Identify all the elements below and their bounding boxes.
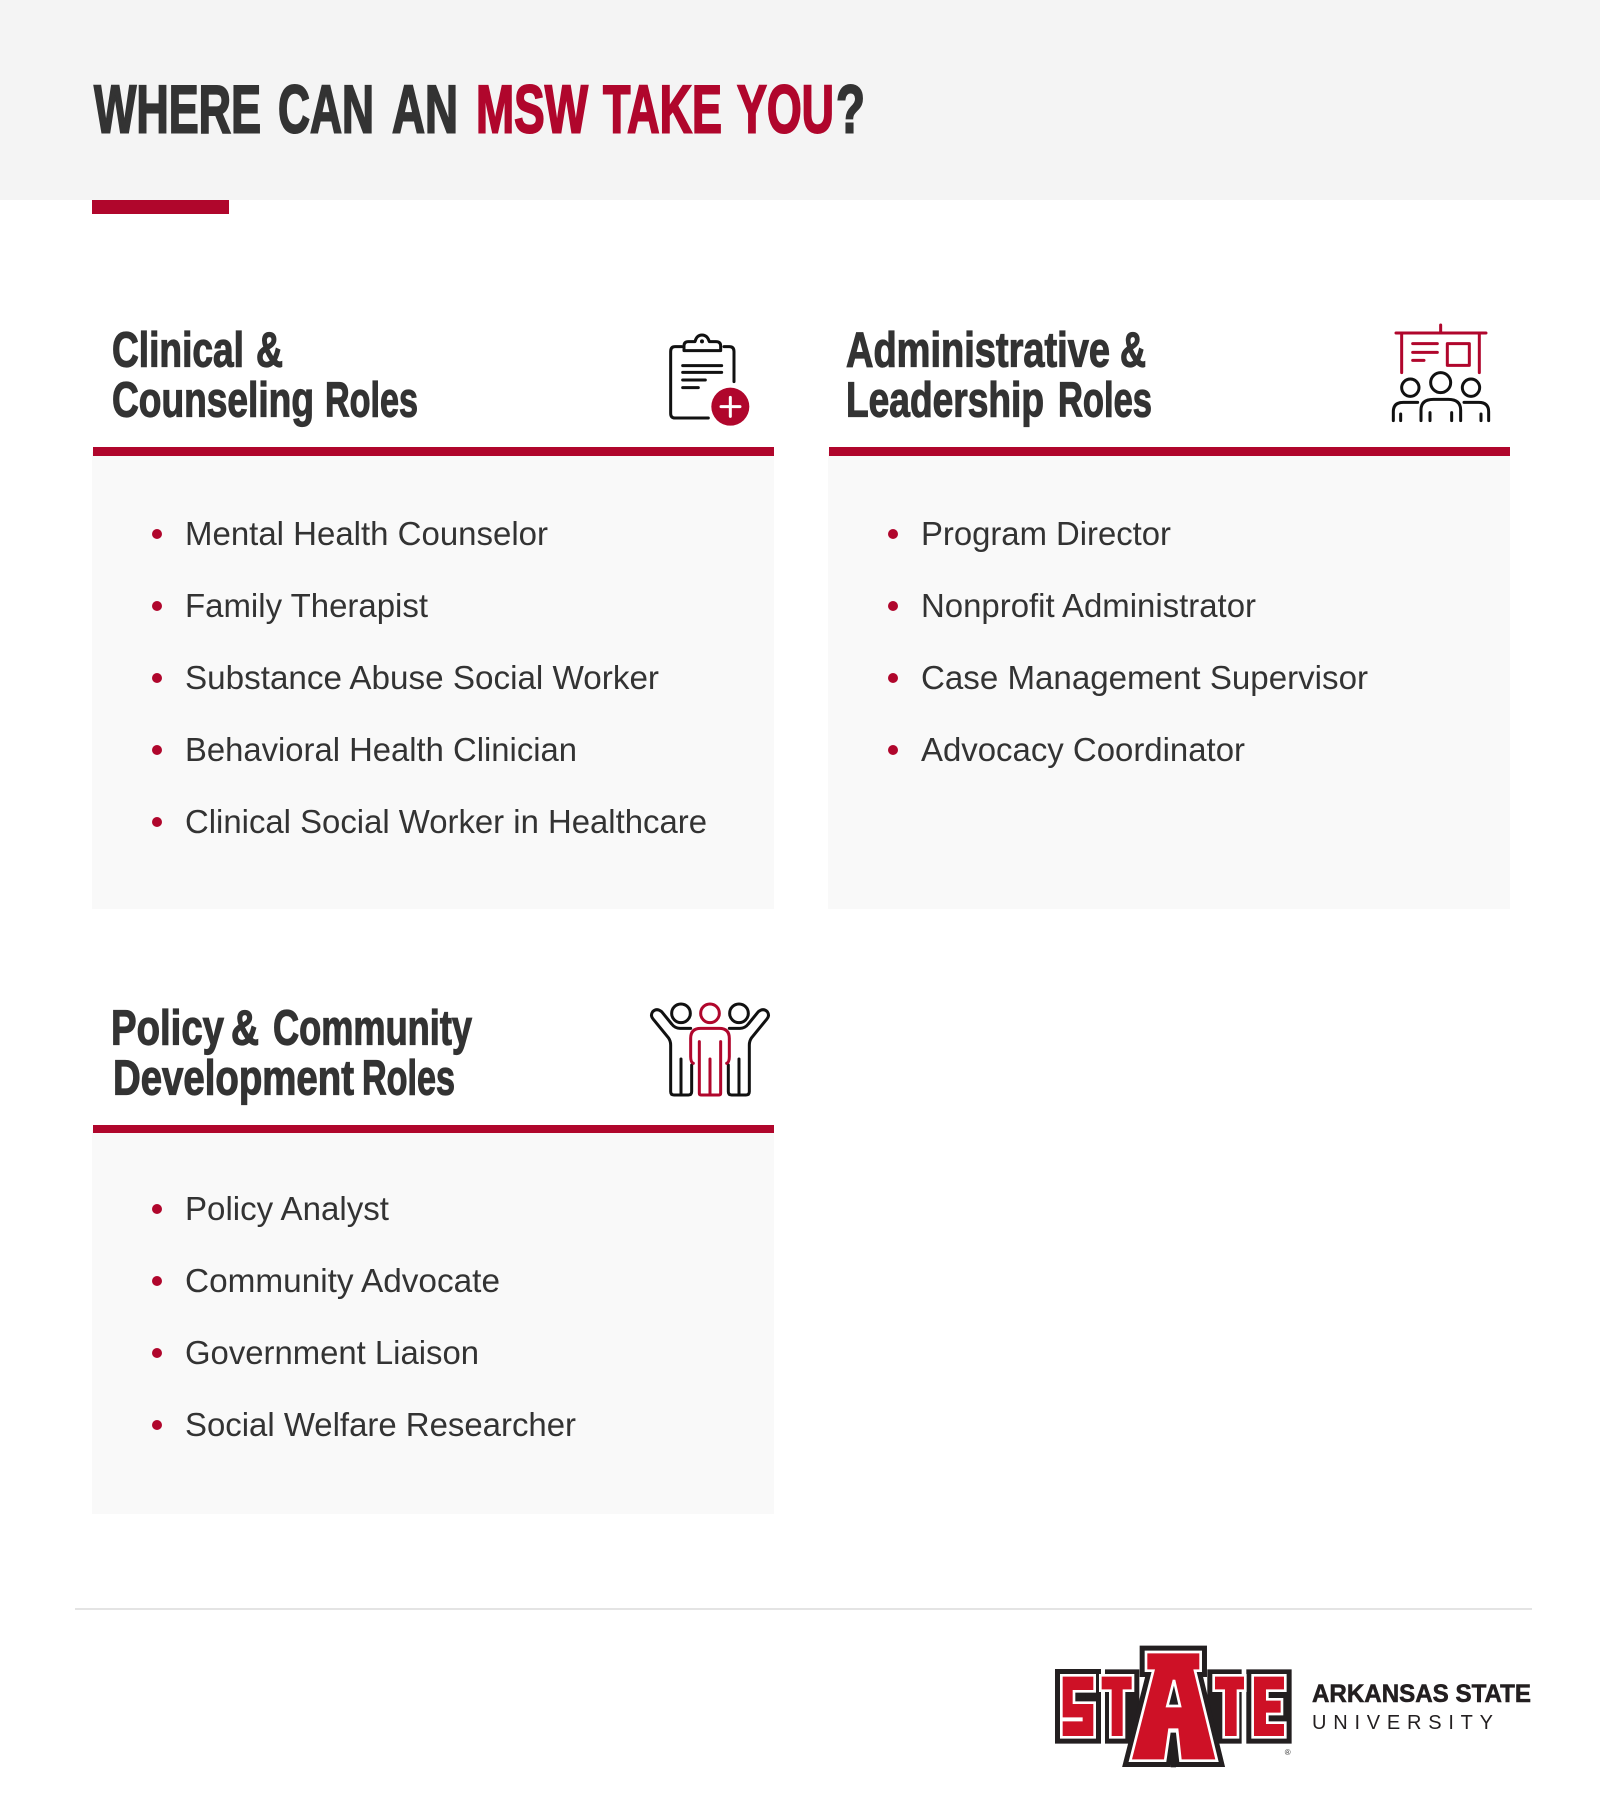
list: policy roles: Social Welfare Researcher [185,1407,576,1444]
list: clinical roles: Substance Abuse Social Worker [185,660,659,697]
heading: clinical and counseling roles: Roles [325,372,418,428]
footer divider [75,1608,1532,1610]
heading: administrative and leadership roles: Administrative [846,322,1110,378]
icon: clipboard with plus [671,335,749,426]
heading: administrative and leadership roles: Roles [1058,372,1152,428]
list: administrative roles: Nonprofit Administrator [921,588,1256,625]
heading: clinical and counseling roles [112,322,418,428]
title: WHERE [94,72,261,148]
panel: clinical and counseling roles [92,322,774,909]
logo: A-State wordmark [1063,1653,1291,1767]
heading: policy and community development roles: & [231,1000,259,1056]
panel: policy and community development roles [92,1000,774,1514]
heading: policy and community development roles [111,1000,472,1106]
list: administrative roles [888,516,1368,769]
list: clinical roles: Behavioral Health Clinician [185,732,577,769]
list: clinical roles: Clinical Social Worker in Healthcare [185,804,707,841]
icon: group of three people [651,1004,769,1095]
heading: clinical and counseling roles: Clinical [112,322,244,378]
list: policy roles: Government Liaison [185,1335,479,1372]
list: policy roles [152,1191,576,1444]
heading: policy and community development roles: Community [273,1000,472,1056]
title: AN [392,72,458,148]
list: policy roles: Community Advocate [185,1263,500,1300]
logo: A-State wordmark: ® [1285,1748,1291,1757]
heading: clinical and counseling roles: & [256,322,283,378]
heading: policy and community development roles: Policy [111,1000,224,1056]
title: TAKE [603,72,722,148]
heading: administrative and leadership roles: & [1120,322,1146,378]
list: clinical roles: Mental Health Counselor [185,516,548,553]
list: administrative roles: Program Director [921,516,1171,553]
list: policy roles: Policy Analyst [185,1191,390,1228]
panel: administrative and leadership roles [828,322,1510,909]
list: administrative roles: Case Management Supervisor [921,660,1368,697]
list: clinical roles: Family Therapist [185,588,429,625]
title: MSW [476,72,589,148]
logo text: Arkansas State University [1312,1680,1531,1734]
logo text: Arkansas State University: ARKANSAS STATE [1312,1680,1531,1708]
heading: administrative and leadership roles: Leadership [846,372,1044,428]
title: CAN [278,72,374,148]
header band [0,0,1600,214]
heading: policy and community development roles: Roles [362,1050,455,1106]
heading: clinical and counseling roles: Counseling [112,372,314,428]
title [94,72,865,148]
icon: presentation board and audience [1393,325,1489,421]
heading: policy and community development roles: Development [113,1050,354,1106]
list: clinical roles [152,516,707,841]
logo text: Arkansas State University: UNIVERSITY [1312,1712,1493,1734]
heading: administrative and leadership roles [846,322,1152,428]
title: YOU [737,72,834,148]
list: administrative roles: Advocacy Coordinator [921,732,1245,769]
title: ? [836,72,865,148]
